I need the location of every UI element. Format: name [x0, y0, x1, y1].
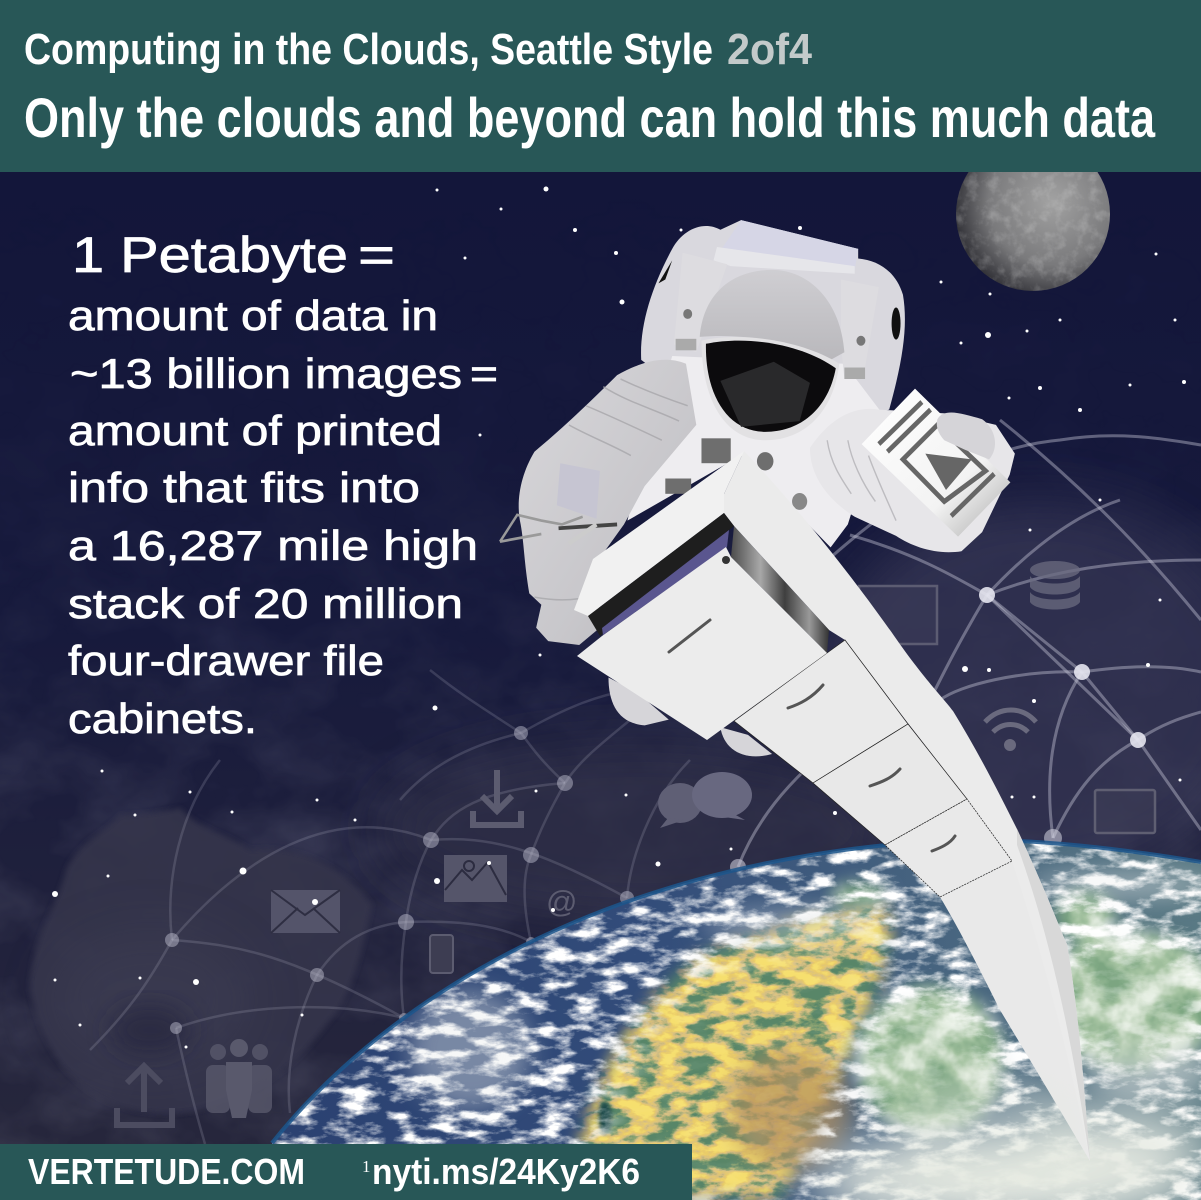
cabinet top face — [574, 451, 744, 616]
strap fittings — [676, 309, 865, 379]
hanging leg shapes — [608, 678, 772, 756]
right network — [730, 420, 1201, 875]
drawer rail — [731, 526, 829, 653]
icon: people — [206, 1039, 272, 1118]
text block: petabyte comparison: amount of printed — [68, 407, 442, 454]
file cabinet — [574, 451, 1090, 1161]
icon: tablet — [1095, 790, 1155, 833]
land: yellow and orange continent — [570, 900, 902, 1200]
helmet ring — [701, 337, 839, 440]
nebula clouds lower left — [30, 808, 372, 1113]
icon: envelope — [271, 890, 340, 933]
text block: petabyte comparison: cabinets. — [68, 695, 257, 742]
drawer handles — [669, 620, 955, 851]
icon: phone — [430, 935, 453, 973]
open drawer front — [577, 547, 827, 740]
footer band — [0, 1144, 692, 1200]
earth atmosphere edge — [272, 840, 1201, 1143]
heading: part number: 2of4 — [727, 25, 812, 74]
icon: picture — [444, 855, 507, 902]
wrist panel — [557, 463, 600, 519]
backpack vents — [658, 260, 901, 340]
left arm — [519, 360, 696, 645]
text block: petabyte comparison: amount of data in — [68, 292, 438, 339]
land: tan plain — [730, 1050, 850, 1170]
document page — [862, 389, 1010, 537]
chest controls — [665, 438, 807, 510]
backpack — [641, 220, 905, 417]
footer: source link: nyti.ms/24Ky2K6 — [372, 1151, 640, 1192]
icon: download — [473, 770, 521, 825]
open drawer cavity — [588, 513, 734, 636]
visor reflection — [720, 362, 810, 427]
network lines and nodes — [90, 420, 1201, 1144]
text block: petabyte comparison: = — [358, 227, 395, 283]
torso — [627, 356, 882, 547]
cloud masses — [410, 871, 1201, 1110]
icon: wifi — [985, 710, 1036, 748]
tether and clips — [500, 515, 617, 544]
space background — [0, 483, 1201, 1144]
heading: series title: Computing in the Clouds, Seattle Style — [24, 25, 713, 74]
cabinet side strip and tail — [724, 451, 1090, 1161]
hanging files — [602, 530, 729, 635]
text block: petabyte comparison: a 16,287 mile high — [68, 522, 478, 569]
footer: source link: 1 — [362, 1157, 370, 1176]
faint data icons — [117, 561, 1155, 1125]
text block: petabyte comparison — [68, 227, 498, 742]
glove — [937, 413, 995, 459]
text block: petabyte comparison: ~13 billion images — [70, 350, 462, 397]
earth — [260, 830, 1201, 1200]
land: green regions — [823, 872, 1201, 1142]
text block: petabyte comparison: 1 Petabyte — [72, 227, 348, 283]
icon: at sign: @ — [546, 884, 577, 919]
white cloud texture — [260, 830, 1201, 1200]
text block: petabyte comparison: info that fits into — [68, 464, 420, 511]
icon: monitor — [859, 586, 937, 644]
text block: petabyte comparison: = — [470, 350, 498, 397]
stars — [52, 186, 1186, 1048]
astronaut — [500, 220, 1015, 756]
moon — [956, 172, 1110, 291]
equipment panel — [714, 220, 858, 274]
tail front — [940, 861, 1090, 1161]
icon: database — [1030, 561, 1080, 610]
left network — [90, 670, 690, 1144]
icon: upload — [117, 1066, 172, 1125]
cloud haze over tail — [896, 1066, 1072, 1158]
drawer 4 — [885, 799, 1012, 897]
text block: petabyte comparison: four-drawer file — [68, 637, 384, 684]
left arm folds — [534, 379, 688, 600]
tail shaded edge — [1017, 829, 1090, 1161]
text block: petabyte comparison: stack of 20 million — [68, 580, 463, 627]
icon: chat bubbles — [658, 772, 752, 828]
right arm — [810, 409, 1015, 552]
drawer 2 — [734, 640, 908, 783]
drawer 3 — [813, 724, 967, 845]
right arm folds — [827, 440, 896, 521]
visor — [706, 341, 836, 432]
header band — [0, 0, 1201, 172]
footer: website: VERTETUDE.COM — [28, 1151, 305, 1192]
drawer screw — [722, 556, 730, 564]
helmet dome — [700, 270, 844, 360]
lake — [598, 1102, 612, 1134]
shoulder straps — [674, 253, 879, 379]
